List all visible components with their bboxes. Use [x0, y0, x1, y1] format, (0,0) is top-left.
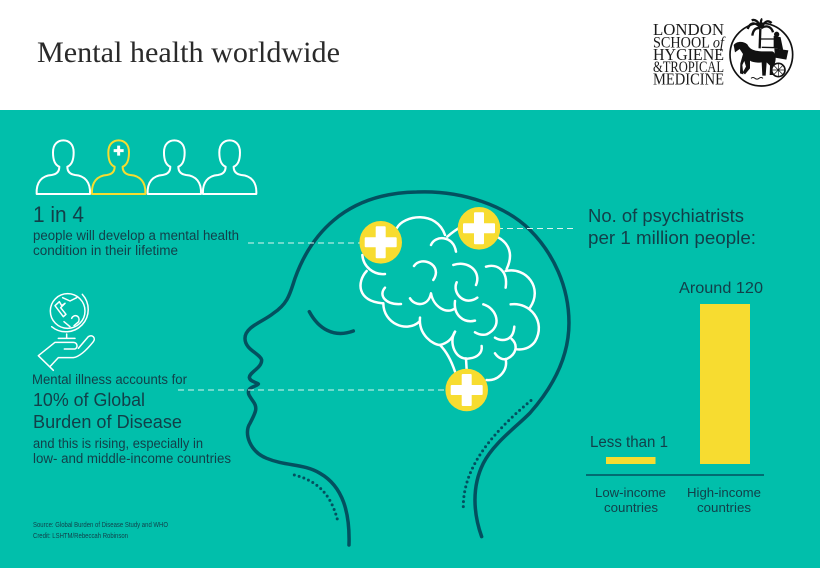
closed eye	[309, 312, 353, 333]
dotted neck line front	[294, 475, 338, 521]
text: source and credit	[33, 522, 168, 540]
connector: psychiatrists to plus	[497, 228, 577, 230]
text: mental illness accounts for: Mental illness accounts for	[32, 372, 187, 387]
connector: burden of disease to plus	[178, 389, 446, 391]
icon: plus badge left	[359, 221, 402, 264]
value label: high income: Around 120	[679, 280, 763, 297]
value label: low income: Less than 1	[590, 434, 668, 451]
bar: high income	[700, 304, 750, 464]
text: people will develop: condition in their lifetime	[33, 243, 178, 258]
logo wordmark: HYGIENE	[653, 45, 724, 64]
panel: global burden of disease	[32, 294, 231, 466]
icon: person 1	[37, 140, 90, 194]
logo wordmark: LONDON	[653, 20, 724, 39]
axis label: high-income countries	[687, 485, 761, 515]
logo wordmark: &TROPICAL	[653, 59, 724, 76]
axis line	[586, 474, 764, 476]
icon: plus badge top right	[458, 207, 500, 250]
stat: 10% of global burden of disease: Burden of Disease	[33, 411, 182, 432]
logo wordmark: MEDICINE	[653, 70, 724, 88]
icon: plus badge bottom	[445, 369, 488, 411]
text: people will develop	[33, 228, 239, 258]
icon: four people	[37, 140, 256, 194]
illustration: brain	[361, 217, 539, 380]
chart heading: psychiatrists per million	[588, 205, 756, 248]
text: source and credit: Credit: LSHTM/Rebeccah Robinson	[33, 533, 128, 540]
axis label: low-income countries: countries	[604, 500, 659, 515]
text: people will develop: people will develop a mental health	[33, 228, 239, 243]
text: rising in low and middle income countries: low- and middle-income countries	[33, 451, 231, 466]
chart heading: psychiatrists per million: No. of psychiatrists	[588, 205, 744, 226]
panel: 1 in 4 statistic	[33, 140, 256, 258]
text: rising in low and middle income countries	[33, 436, 231, 466]
connector: 1 in 4 to plus	[248, 242, 360, 244]
chart heading: psychiatrists per million: per 1 million people:	[588, 227, 756, 248]
text: source and credit: Source: Global Burden of Disease Study and WHO	[33, 522, 168, 529]
logo roundel	[730, 19, 793, 86]
icon: person 3	[148, 140, 201, 194]
icon: hand holding globe	[38, 294, 94, 370]
axis label: high-income countries: High-income	[687, 485, 761, 500]
stat: 10% of global burden of disease	[33, 389, 182, 432]
title: Mental health worldwide	[37, 36, 340, 69]
stat: 1 in 4: 1 in 4	[33, 202, 84, 227]
logo wordmark: SCHOOL of	[653, 34, 726, 52]
icon: person 4	[203, 140, 256, 194]
panel: white header	[0, 0, 820, 110]
logo wordmark	[653, 20, 726, 88]
axis label: low-income countries: Low-income	[595, 485, 666, 500]
logo: LSHTM	[653, 19, 793, 88]
axis label: high-income countries: countries	[697, 500, 752, 515]
icon: highlighted person with plus	[92, 140, 145, 194]
dotted neck line back	[463, 400, 532, 507]
bar: low income	[606, 457, 656, 464]
illustration: head in profile	[245, 192, 569, 545]
axis label: low-income countries	[595, 485, 666, 515]
bar chart: psychiatrists by income	[586, 280, 764, 515]
stat: 10% of global burden of disease: 10% of Global	[33, 389, 145, 410]
head outline	[245, 192, 569, 545]
text: rising in low and middle income countries: and this is rising, especially in	[33, 436, 203, 451]
